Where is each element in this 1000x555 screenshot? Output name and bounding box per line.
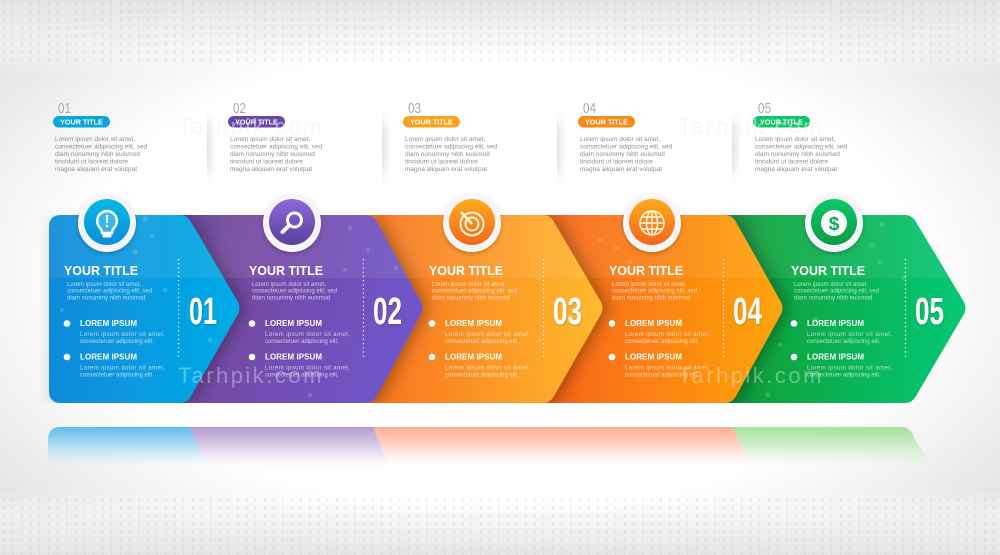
- card 02: YOUR TITLE: [235, 117, 278, 126]
- card 05: consectetuer adipiscing elit, sed: [755, 144, 848, 150]
- card 03: 03: [408, 100, 421, 117]
- arrow 01 blue: [49, 215, 240, 403]
- top information cards: [53, 100, 848, 173]
- list item 2: Lorem ipsum dolor sit amet,: [80, 366, 165, 372]
- description: [794, 282, 879, 302]
- card 04: diam nonummy nibh euismod: [580, 151, 665, 158]
- step 05 content: [791, 194, 944, 378]
- card 04: [578, 100, 673, 173]
- description: diam nonummy nibh euismod: [794, 296, 872, 302]
- description: [252, 282, 337, 302]
- list item 2: LOREM IPSUM: [807, 352, 864, 362]
- description: diam nonummy nibh euismod: [432, 296, 510, 302]
- list item 1: [429, 319, 530, 345]
- list item 2: consectetuer adipiscing elit.: [80, 372, 154, 378]
- description: Lorem ipsum dolor sit amet,: [612, 282, 686, 288]
- card 04: Lorem ipsum dolor sit amet,: [580, 136, 660, 143]
- list item 1: consectetuer adipiscing elit.: [807, 339, 881, 345]
- description: [432, 282, 517, 302]
- description: consectetuer adipiscing elit, sed: [612, 288, 697, 294]
- list item 1: Lorem ipsum dolor sit amet,: [80, 332, 165, 338]
- card 01: diam nonummy nibh euismod: [55, 151, 140, 158]
- floating particles: [60, 216, 906, 398]
- list item 2: Lorem ipsum dolor sit amet,: [445, 366, 530, 372]
- list item 1: [64, 319, 165, 345]
- icon: globe badge: [623, 194, 681, 252]
- reflection of the arrow band: [48, 427, 934, 468]
- card 01: 01: [58, 100, 71, 117]
- icon: magnifier badge: [263, 194, 321, 252]
- arrow shapes clipped to the band: [49, 215, 966, 403]
- card 02: Lorem ipsum dolor sit amet,: [230, 136, 310, 143]
- heading: YOUR TITLE: [609, 264, 683, 278]
- step 04 content: [609, 194, 762, 378]
- list item 2: LOREM IPSUM: [445, 352, 502, 362]
- number 01: 01: [189, 291, 217, 333]
- card 02: magna aliquam erat volutpat: [230, 166, 312, 173]
- watermarks: [178, 114, 822, 388]
- description: [612, 282, 697, 302]
- description: Lorem ipsum dolor sit amet,: [794, 282, 868, 288]
- card 05: diam nonummy nibh euismod: [755, 151, 840, 158]
- watermarks: Tarhpik.com: [678, 363, 822, 388]
- description: Lorem ipsum dolor sit amet,: [432, 282, 506, 288]
- list item 1: consectetuer adipiscing elit.: [445, 339, 519, 345]
- list item 1: consectetuer adipiscing elit.: [625, 339, 699, 345]
- number 03: 03: [553, 291, 582, 333]
- card 05: [753, 100, 848, 173]
- card 03: Lorem ipsum dolor sit amet,: [405, 136, 485, 143]
- arrow 05 green: [700, 215, 966, 403]
- list item 1: LOREM IPSUM: [445, 319, 502, 328]
- list item 2: [609, 352, 710, 378]
- heading: YOUR TITLE: [429, 264, 503, 278]
- card 03: magna aliquam erat volutpat: [405, 166, 487, 173]
- card 04: consectetuer adipiscing elit, sed: [580, 144, 673, 150]
- step 02 content: [249, 194, 402, 378]
- list item 1: consectetuer adipiscing elit.: [80, 339, 154, 345]
- card 05: tincidunt ut laoreet dolore: [755, 158, 828, 166]
- description: diam nonummy nibh euismod: [612, 296, 690, 302]
- heading: YOUR TITLE: [64, 264, 138, 278]
- upper band sheen: [49, 215, 949, 278]
- list item 2: [791, 352, 892, 378]
- card edge shadows: [207, 122, 741, 172]
- list item 2: [249, 352, 350, 378]
- card 05: Lorem ipsum dolor sit amet,: [755, 136, 835, 143]
- list item 2: consectetuer adipiscing elit.: [265, 372, 339, 378]
- card 02: 02: [233, 100, 246, 117]
- list item 1: Lorem ipsum dolor sit amet,: [807, 332, 892, 338]
- heading: YOUR TITLE: [791, 264, 865, 278]
- icon: light bulb badge: [78, 194, 136, 252]
- description: consectetuer adipiscing elit, sed: [67, 288, 152, 294]
- list item 1: Lorem ipsum dolor sit amet,: [625, 332, 710, 338]
- card 02: [228, 100, 323, 173]
- card 05: magna aliquam erat volutpat: [755, 166, 837, 173]
- list item 2: Lorem ipsum dolor sit amet,: [265, 366, 350, 372]
- list item 1: [791, 319, 892, 345]
- number 05: 05: [915, 291, 944, 333]
- list item 1: Lorem ipsum dolor sit amet,: [265, 332, 350, 338]
- card 05: YOUR TITLE: [760, 117, 803, 126]
- card 02: diam nonummy nibh euismod: [230, 151, 315, 158]
- list item 2: LOREM IPSUM: [625, 352, 682, 362]
- list item 1: consectetuer adipiscing elit.: [265, 339, 339, 345]
- list item 2: LOREM IPSUM: [265, 352, 322, 362]
- card 03: tincidunt ut laoreet dolore: [405, 158, 478, 166]
- card 04: YOUR TITLE: [585, 117, 628, 126]
- number 04: 04: [733, 291, 762, 333]
- list item 2: Lorem ipsum dolor sit amet,: [625, 366, 710, 372]
- card 05: 05: [758, 100, 771, 117]
- card 01: [53, 100, 148, 173]
- description: diam nonummy nibh euismod: [67, 296, 145, 302]
- description: Lorem ipsum dolor sit amet,: [67, 282, 141, 288]
- card 03: diam nonummy nibh euismod: [405, 151, 490, 158]
- watermarks: Tarhpik.com: [178, 114, 322, 139]
- list item 2: consectetuer adipiscing elit.: [807, 372, 881, 378]
- card 02: consectetuer adipiscing elit, sed: [230, 144, 323, 150]
- arrow band: [49, 194, 966, 403]
- card 04: 04: [583, 100, 596, 117]
- list item 2: [64, 352, 165, 378]
- list item 1: LOREM IPSUM: [807, 319, 864, 328]
- arrow 04 dark orange: [520, 215, 782, 403]
- card 03: YOUR TITLE: [410, 117, 453, 126]
- list item 1: LOREM IPSUM: [80, 319, 137, 328]
- list item 2: LOREM IPSUM: [80, 352, 137, 362]
- card 01: magna aliquam erat volutpat: [55, 166, 137, 173]
- icon: dollar coin badge: $: [829, 214, 840, 235]
- icon: dollar coin badge: [805, 194, 863, 252]
- list item 1: [609, 319, 710, 345]
- description: [67, 282, 152, 302]
- description: consectetuer adipiscing elit, sed: [252, 288, 337, 294]
- card 01: tincidunt ut laoreet dolore: [55, 158, 128, 166]
- description: diam nonummy nibh euismod: [252, 296, 330, 302]
- list item 1: LOREM IPSUM: [625, 319, 682, 328]
- list item 2: Lorem ipsum dolor sit amet,: [807, 366, 892, 372]
- list item 2: consectetuer adipiscing elit.: [625, 372, 699, 378]
- list item 1: Lorem ipsum dolor sit amet,: [445, 332, 530, 338]
- list item 1: [249, 319, 350, 345]
- card 04: tincidunt ut laoreet dolore: [580, 158, 653, 166]
- card 02: tincidunt ut laoreet dolore: [230, 158, 303, 166]
- watermarks: Tarhpik.com: [178, 363, 322, 388]
- icon: target badge: [443, 194, 501, 252]
- heading: YOUR TITLE: [249, 264, 323, 278]
- card 01: YOUR TITLE: [60, 117, 103, 126]
- list item 2: [429, 352, 530, 378]
- card 03: [403, 100, 498, 173]
- description: consectetuer adipiscing elit, sed: [432, 288, 517, 294]
- step 03 content: [429, 194, 582, 378]
- number 02: 02: [373, 291, 402, 333]
- description: consectetuer adipiscing elit, sed: [794, 288, 879, 294]
- watermarks: Tarhpik.com: [678, 114, 822, 139]
- step 01 content: [64, 194, 217, 378]
- description: Lorem ipsum dolor sit amet,: [252, 282, 326, 288]
- list item 1: LOREM IPSUM: [265, 319, 322, 328]
- card 03: consectetuer adipiscing elit, sed: [405, 144, 498, 150]
- card 01: Lorem ipsum dolor sit amet,: [55, 136, 135, 143]
- card 01: consectetuer adipiscing elit, sed: [55, 144, 148, 150]
- arrow 03 orange: [340, 215, 602, 403]
- card 04: magna aliquam erat volutpat: [580, 166, 662, 173]
- list item 2: consectetuer adipiscing elit.: [445, 372, 519, 378]
- arrow 02 purple: [160, 215, 422, 403]
